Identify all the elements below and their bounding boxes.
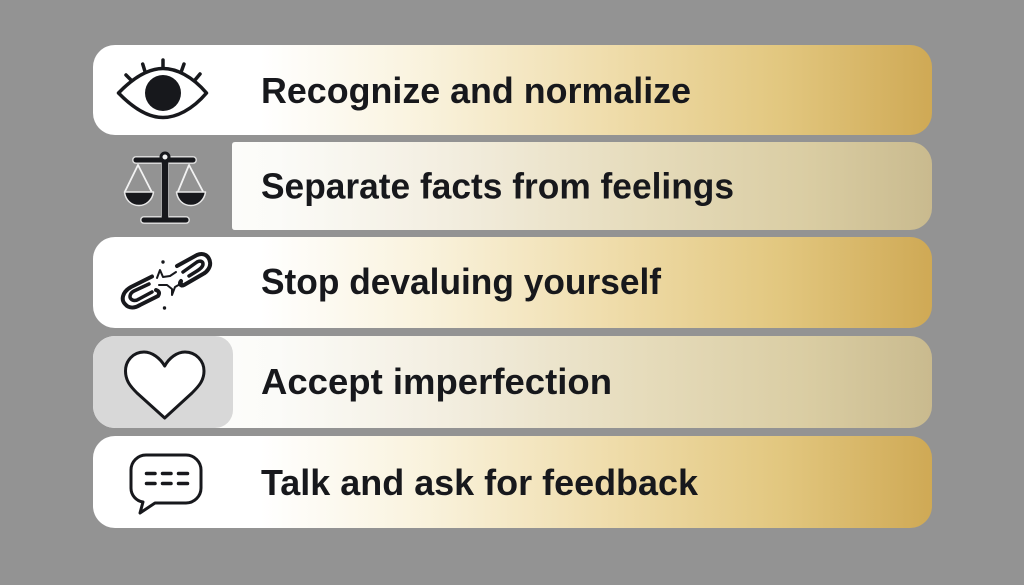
label: Separate facts from feelings bbox=[261, 166, 734, 206]
icon tile bbox=[93, 336, 233, 428]
icon: scales bbox=[124, 153, 206, 220]
label: Accept imperfection bbox=[261, 361, 612, 402]
icon: speech bubble bbox=[131, 455, 201, 513]
panel: separate facts from feelings bbox=[124, 142, 932, 230]
label: Recognize and normalize bbox=[261, 70, 691, 111]
icon: heart bbox=[126, 352, 204, 418]
icon: broken chain bbox=[123, 254, 210, 310]
panel: talk and ask for feedback bbox=[93, 436, 932, 528]
panel: recognize and normalize bbox=[93, 45, 932, 135]
panel: stop devaluing yourself bbox=[93, 237, 932, 328]
panel: accept imperfection bbox=[93, 336, 932, 428]
label: Talk and ask for feedback bbox=[261, 462, 699, 503]
label: Stop devaluing yourself bbox=[261, 261, 662, 302]
icon: eye bbox=[118, 60, 206, 118]
